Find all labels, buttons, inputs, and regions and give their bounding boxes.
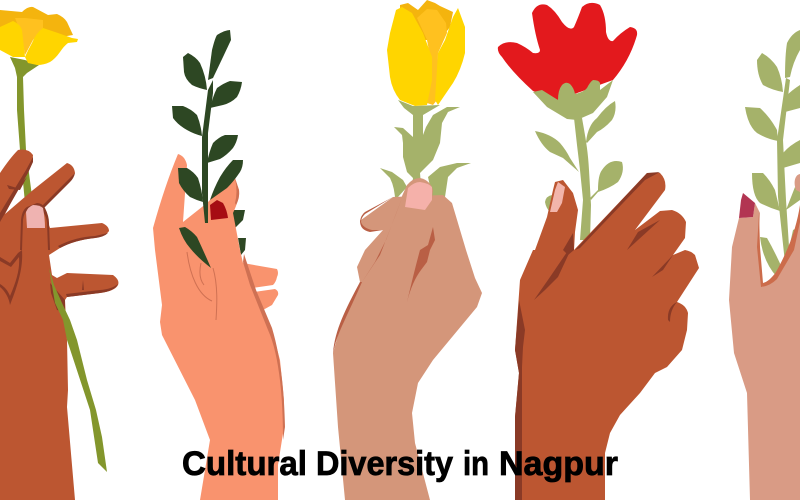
finger rim: [360, 197, 393, 232]
crimson fingernail: [739, 193, 755, 218]
thumb outline: [20, 203, 50, 250]
index finger upper rim: [575, 172, 660, 250]
leaves behind hand: [228, 210, 246, 255]
dark green sprig with peach hand: [153, 30, 285, 500]
third finger crease: [652, 255, 673, 277]
tulip back petals: [400, 0, 453, 40]
brown hand and forearm: [515, 173, 699, 500]
olive sprig with tan hand at right edge: [729, 30, 800, 500]
title: in: [463, 445, 489, 483]
red petals: [498, 3, 637, 100]
fingertip edge: [235, 178, 239, 205]
rose centre petal: [15, 18, 43, 55]
flower calyx: [533, 80, 613, 120]
arm rim: [333, 282, 362, 353]
rim shadow on right of arm: [243, 254, 285, 440]
tulip centre petal: [417, 9, 447, 105]
rose sepal: [10, 57, 39, 77]
flower stem and leaves: [535, 101, 623, 240]
fourth finger crease: [668, 302, 677, 322]
tan hand and forearm: [333, 195, 482, 500]
palm crease: [0, 250, 22, 305]
title: Diversity: [316, 445, 453, 483]
palm crease: [407, 227, 435, 302]
thumb crease: [563, 233, 574, 255]
title: Nagpur: [499, 445, 618, 483]
sprig stem: [777, 78, 790, 263]
red fingernail: [210, 200, 228, 220]
thumbnail: [405, 182, 432, 210]
hand and forearm: [0, 150, 118, 500]
bottom right leaf: [238, 238, 246, 255]
yellow tulip with tan hand: [333, 0, 482, 500]
red flower with brown hand: [498, 3, 699, 500]
hand creases: [187, 252, 217, 320]
yellow rose with stem: [0, 7, 78, 204]
sprig stem: [202, 80, 213, 223]
hand inner outline: [757, 205, 800, 287]
sprig leaves: [172, 30, 243, 268]
left arm shadow: [515, 300, 525, 500]
rose right petal: [25, 28, 78, 65]
knuckle crease: [534, 247, 572, 300]
second finger rim: [627, 220, 660, 250]
stem in front of wrist: [49, 268, 107, 472]
title: [182, 445, 618, 483]
tulip left petal: [387, 7, 432, 106]
dark brown hand: [0, 150, 118, 500]
peach hand and forearm: [153, 154, 284, 500]
wrist shadow: [50, 283, 65, 312]
tulip leaves and stem: [380, 100, 471, 210]
thumbnail: [26, 205, 45, 228]
rose stem: [17, 77, 33, 204]
rose back petals: [0, 7, 73, 40]
tan hand and forearm: [729, 203, 800, 500]
finger rims and creases: [0, 157, 118, 297]
thumb rim: [362, 190, 405, 282]
rose left petal: [0, 21, 25, 57]
tulip right petal: [435, 8, 465, 105]
lower right leaf: [228, 210, 245, 228]
thumbnail: [550, 182, 565, 212]
thumb: [382, 178, 433, 262]
adjacent fingertip: [795, 174, 800, 192]
title: Cultural: [182, 445, 307, 483]
sprig leaves: [745, 30, 800, 277]
